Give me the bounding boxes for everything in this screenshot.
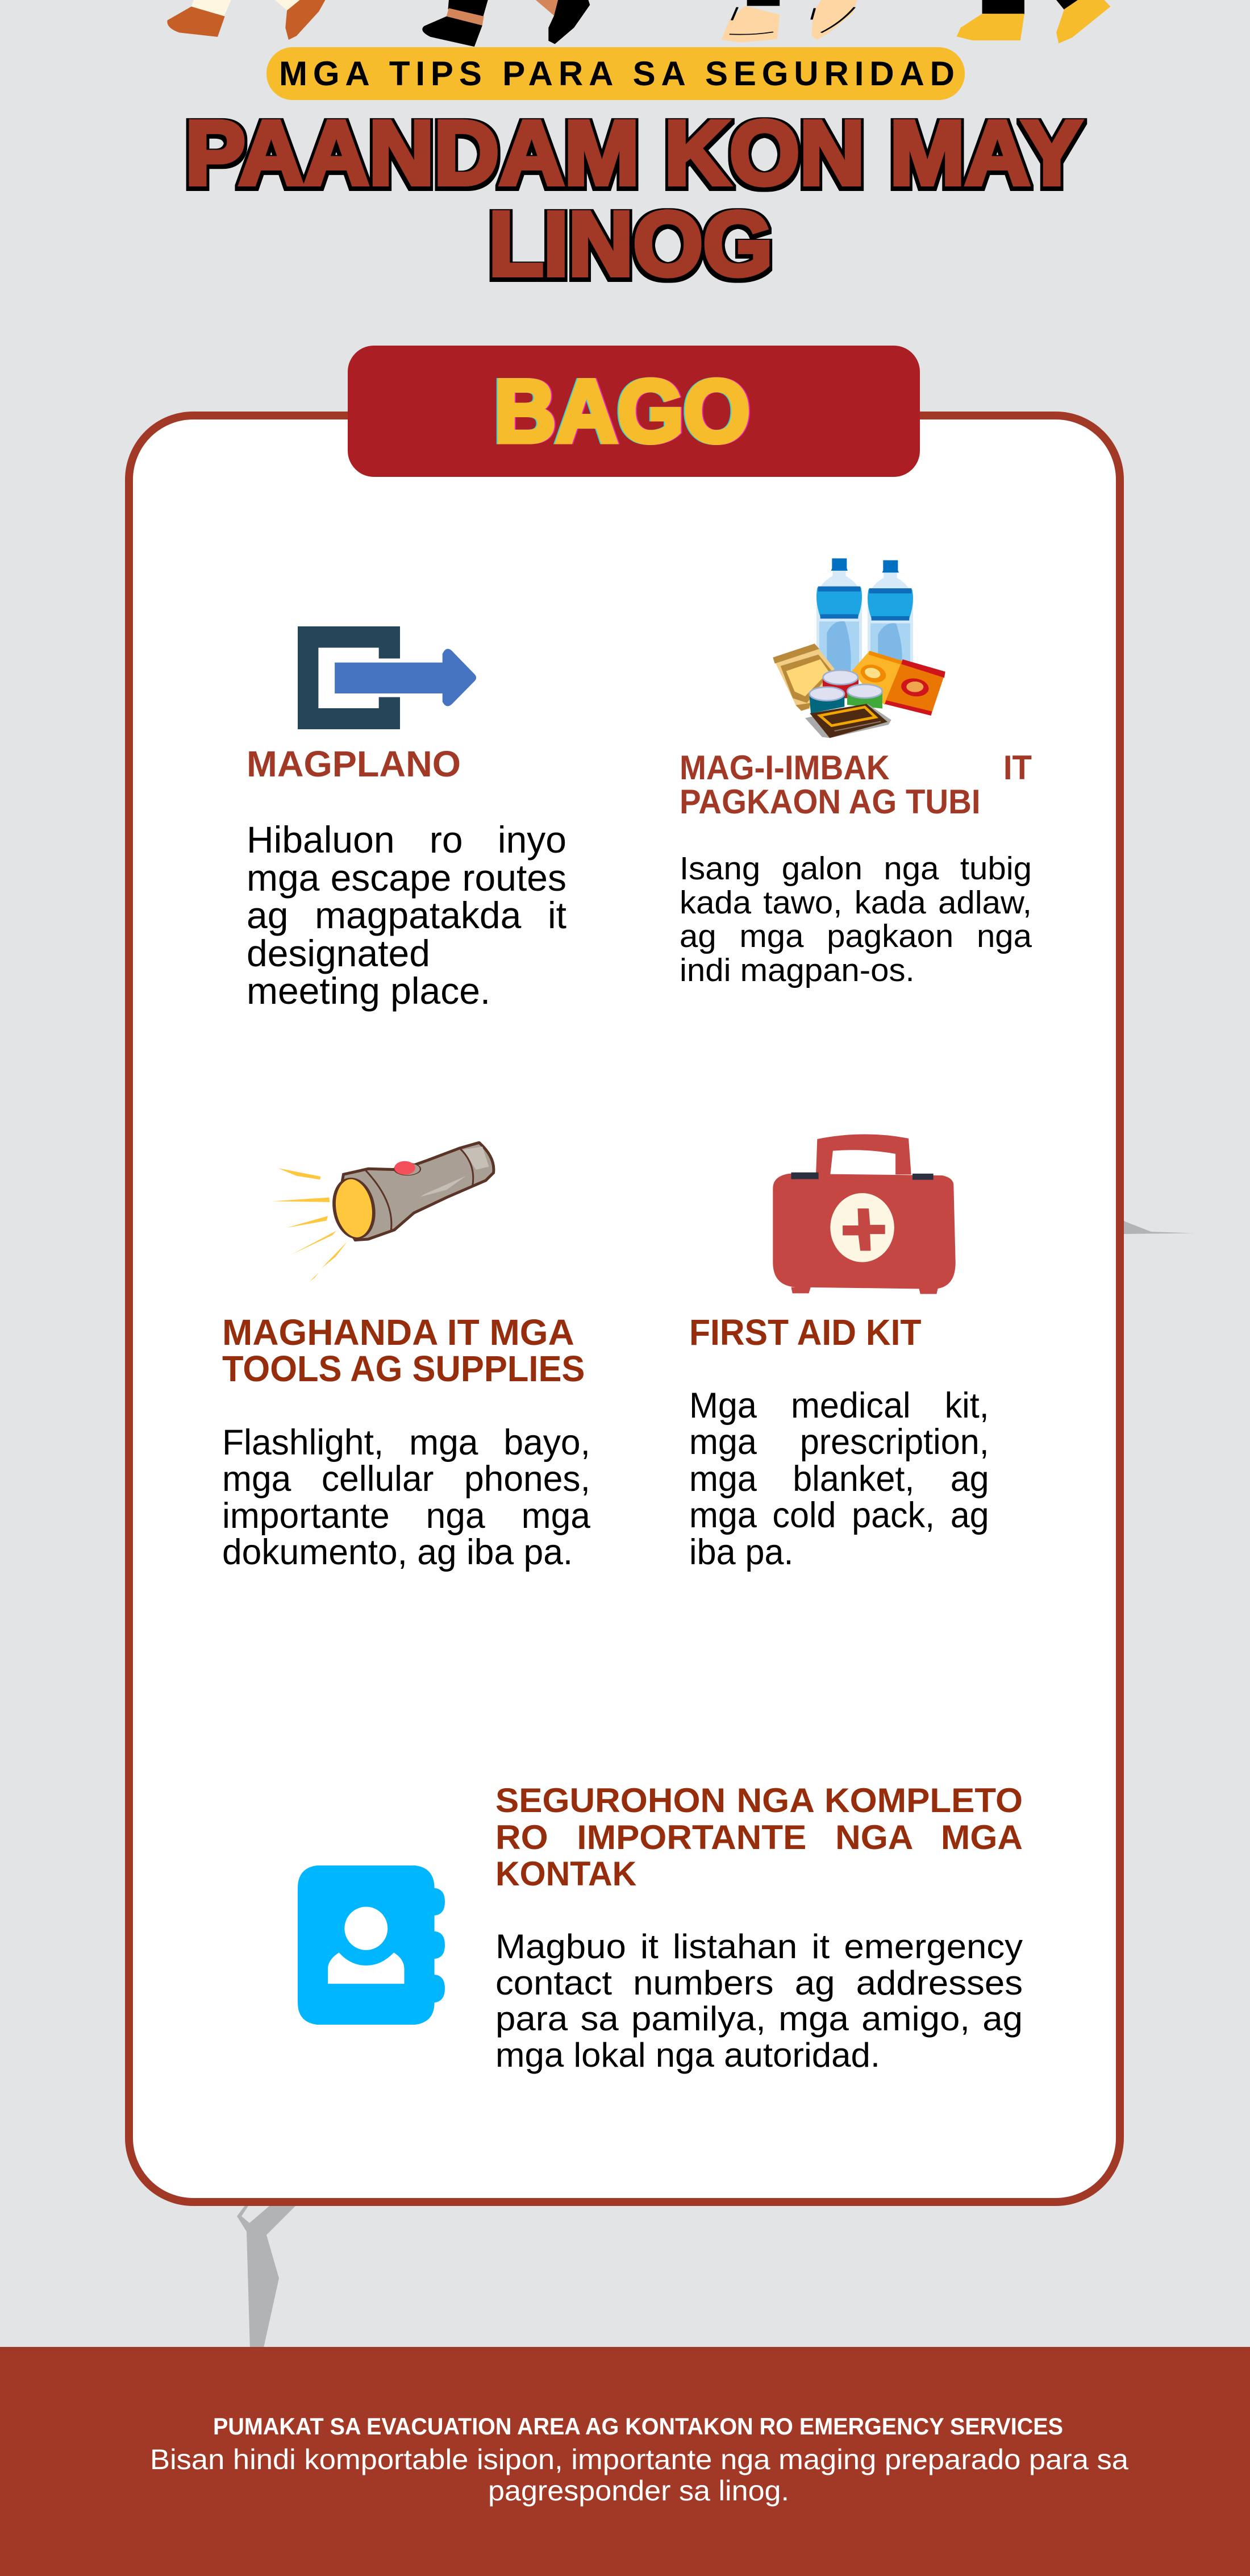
footer band — [0, 2347, 1250, 2576]
heading: KONTAK — [495, 1855, 636, 1893]
subtitle pill: MGA TIPS PARA SA SEGURIDAD — [279, 55, 955, 93]
text block — [247, 818, 566, 1012]
heading: MAG-I-IMBAK IT — [680, 749, 1032, 787]
icon: first aid kit — [773, 1135, 956, 1294]
text block: iba pa. — [689, 1532, 793, 1572]
title — [185, 108, 1088, 290]
icon: flashlight — [273, 1141, 495, 1282]
icon: water and food — [773, 558, 945, 738]
heading — [222, 1312, 585, 1389]
footer text — [150, 2413, 1128, 2507]
text block: mga prescription, — [689, 1422, 989, 1462]
text block — [689, 1386, 989, 1572]
heading: MAGHANDA IT MGA — [222, 1312, 574, 1353]
heading: PAGKAON AG TUBI — [680, 783, 981, 821]
footer text: pagresponder sa linog. — [488, 2475, 789, 2507]
text block: kada tawo, kada adlaw, — [680, 884, 1032, 921]
text block: mga cold pack, ag — [689, 1495, 989, 1535]
text block — [495, 1927, 1023, 2074]
text block: dokumento, ag iba pa. — [222, 1532, 573, 1572]
text block: Hibaluon ro inyo — [247, 818, 566, 861]
heading — [495, 1781, 1023, 1893]
panel: first aid kit — [689, 1135, 989, 1572]
text block — [222, 1423, 590, 1572]
panel: main card — [125, 412, 1124, 2206]
text block: indi magpan-os. — [680, 952, 915, 988]
panel: magplano — [247, 626, 566, 1012]
footer text: PUMAKAT SA EVACUATION AREA AG KONTAKON RO EMERGENCY SERVICES — [213, 2413, 1063, 2440]
text block: designated — [247, 932, 430, 974]
panel: kontak — [298, 1781, 1023, 2074]
text block: ag mga pagkaon nga — [680, 918, 1032, 954]
text block — [680, 850, 1032, 988]
text block: para sa pamilya, mga amigo, ag — [495, 2000, 1023, 2038]
icon: exit arrow — [298, 626, 476, 729]
crack: right side — [1124, 1221, 1192, 1234]
footer text: Bisan hindi komportable isipon, importante nga maging preparado para sa — [150, 2444, 1128, 2475]
panel: mag-i-imbak — [680, 558, 1032, 988]
heading tab: BAGO — [348, 346, 920, 477]
text block: meeting place. — [247, 970, 490, 1012]
heading: FIRST AID KIT — [689, 1312, 922, 1353]
text block: Magbuo it listahan it emergency — [495, 1927, 1023, 1966]
text block: mga lokal nga autoridad. — [495, 2036, 880, 2074]
text block: Isang galon nga tubig — [680, 850, 1032, 887]
text block: importante nga mga — [222, 1496, 590, 1536]
heading: RO IMPORTANTE NGA MGA — [495, 1818, 1023, 1856]
heading: MAGPLANO — [247, 743, 461, 784]
heading tab: BAGO: BAGO — [494, 362, 750, 461]
subtitle pill — [266, 47, 965, 100]
text block: mga escape routes — [247, 856, 566, 898]
icon: contact book — [298, 1865, 445, 2025]
text block: mga blanket, ag — [689, 1459, 989, 1499]
text block: mga cellular phones, — [222, 1459, 590, 1499]
crack: lower left — [237, 2206, 295, 2347]
text block: Mga medical kit, — [689, 1386, 989, 1426]
text block: ag magpatakda it — [247, 894, 566, 936]
illustration: walking feet — [167, 0, 1110, 47]
text block: Flashlight, mga bayo, — [222, 1423, 590, 1462]
heading: SEGUROHON NGA KOMPLETO — [495, 1781, 1023, 1819]
text block: contact numbers ag addresses — [495, 1964, 1023, 2002]
heading: TOOLS AG SUPPLIES — [222, 1348, 585, 1389]
panel: maghanda — [222, 1141, 590, 1572]
heading — [680, 749, 1032, 821]
